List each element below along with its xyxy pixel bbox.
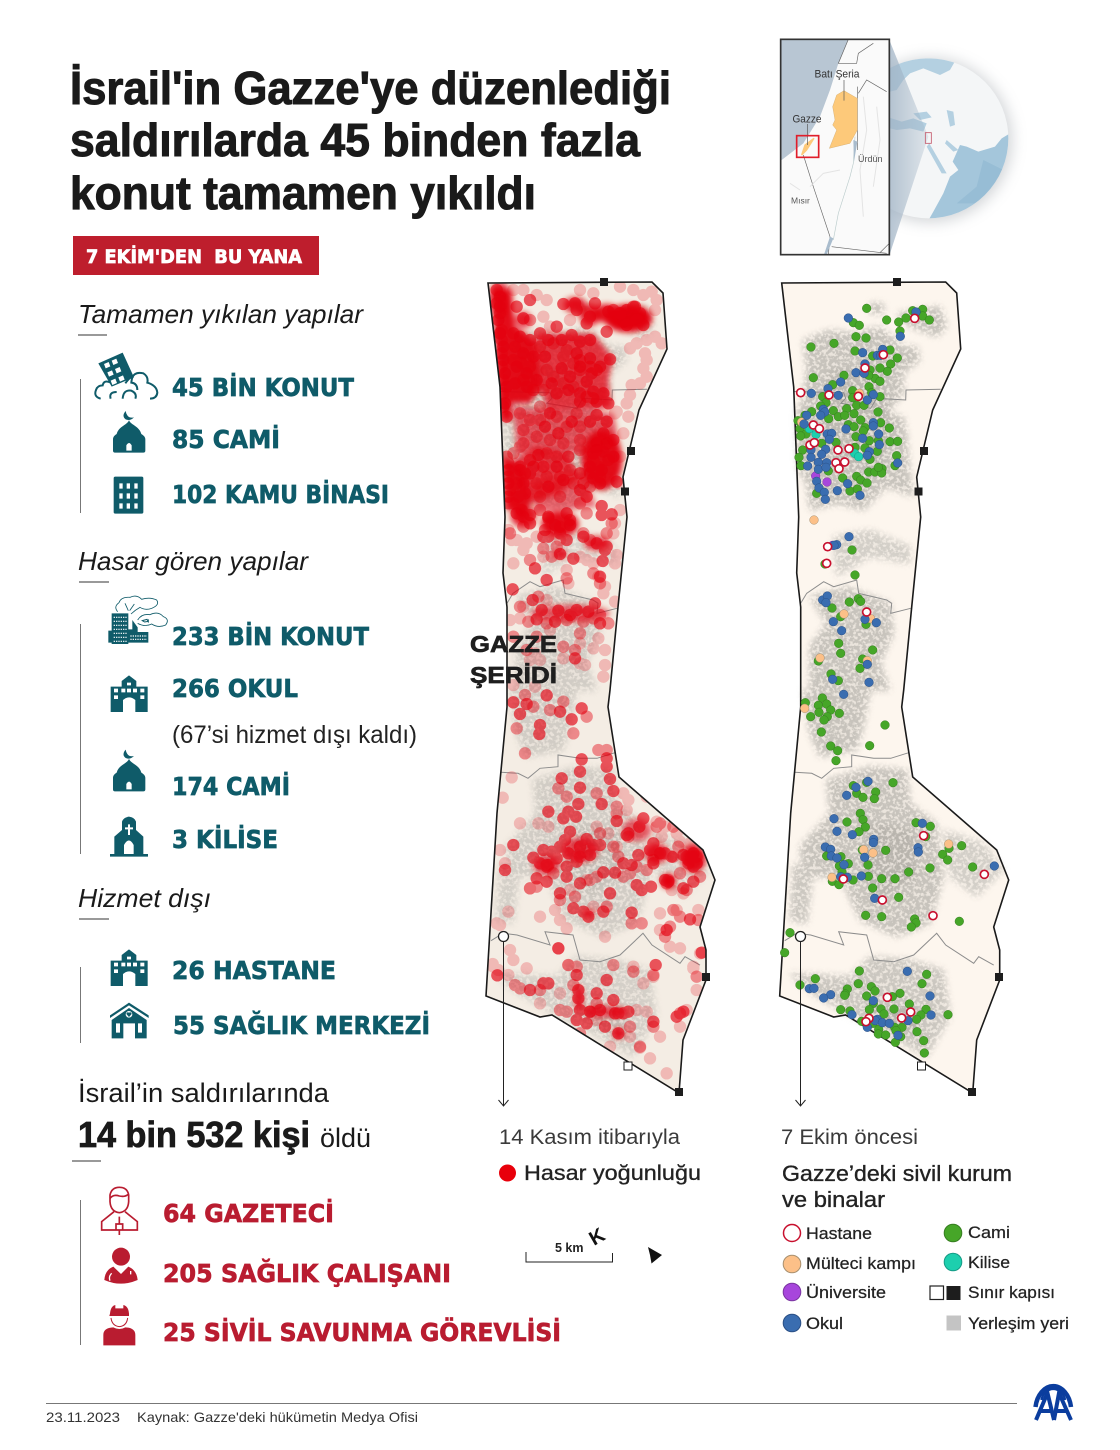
legend item: church: Kilise [968, 1253, 1010, 1272]
footer: date and source: Kaynak: Gazze'deki hükümetin Medya Ofisi [137, 1409, 418, 1425]
map label: Jordan: Ürdün [858, 154, 883, 164]
title: konut tamamen yıkıldı [70, 167, 536, 219]
strip base [486, 282, 715, 1093]
label: Gaza Strip: ŞERİDİ [470, 662, 557, 688]
label: 266 schools: 266 OKUL [172, 674, 298, 703]
strip base [780, 282, 1009, 1093]
scale bar [526, 1241, 612, 1262]
text: casualties intro: İsrail’in saldırılarında [78, 1077, 330, 1108]
legend item: refugee camp: Mülteci kampı [806, 1254, 916, 1273]
north marker: K [586, 1224, 609, 1250]
label: 45 thousand homes: 45 BİN KONUT [172, 372, 354, 402]
panel: damaged structures [78, 546, 417, 857]
legend item: university: Üniversite [806, 1283, 886, 1302]
badge: since 7 October [73, 236, 319, 275]
marker: leader arrow [796, 932, 806, 1106]
icon: civil defence worker [103, 1305, 135, 1345]
label: Gaza Strip [470, 631, 557, 688]
icon: school [111, 675, 148, 712]
locator: regional map [781, 39, 889, 255]
legend item: mosque: Cami [968, 1223, 1010, 1242]
map: civil institutions [780, 278, 1009, 1106]
legend title: ve binalar [782, 1187, 885, 1212]
panel: out of service [78, 883, 430, 1043]
icon: health worker [104, 1248, 138, 1284]
heading: destroyed structures: Tamamen yıkılan yapılar [78, 299, 364, 329]
label: 25 civil defence: 25 SİVİL SAVUNMA GÖREVLİSİ [163, 1317, 561, 1347]
label: 55 health centres: 55 SAĞLIK MERKEZİ [173, 1010, 430, 1040]
legend item: school: Okul [806, 1314, 843, 1333]
label: 85 mosques: 85 CAMİ [172, 424, 280, 454]
map label: Egypt: Mısır [791, 196, 810, 206]
badge: since 7 October: 7 EKİM'DEN BU YANA [86, 244, 302, 268]
institution dots north [794, 304, 934, 687]
note: out of service schools: (67’si hizmet dışı kaldı) [172, 721, 417, 749]
region: Gaza [802, 138, 814, 155]
icon: hospital [111, 949, 148, 986]
icon: church [110, 817, 148, 857]
icon: collapsing building [95, 353, 157, 399]
label: 26 hospitals: 26 HASTANE [172, 956, 336, 985]
logo: AA [1036, 1386, 1071, 1420]
legend: damage density: Hasar yoğunluğu [524, 1162, 701, 1185]
damage dots north [497, 287, 662, 687]
damage blobs south [533, 819, 706, 1039]
heading: damaged structures: Hasar gören yapılar [78, 546, 309, 576]
legend item: border crossing: Sınır kapısı [968, 1283, 1055, 1302]
legend item: settlement: Yerleşim yeri [968, 1314, 1069, 1333]
icon: journalist [102, 1187, 137, 1235]
title [70, 62, 671, 219]
damage dots south [493, 695, 702, 1073]
title: İsrail'in Gazze'ye düzenlediği [70, 62, 671, 114]
caption: before 7 October: 7 Ekim öncesi [781, 1126, 918, 1149]
legend: institutions [783, 1223, 1069, 1333]
border crossings [600, 278, 710, 1096]
label: Gaza Strip: GAZZE [470, 631, 557, 657]
title: saldırılarda 45 binden fazla [70, 114, 640, 166]
label: 64 journalists: 64 GAZETECİ [163, 1198, 334, 1228]
region: West Bank [829, 91, 857, 148]
locator: globe [890, 42, 1018, 253]
footer: date and source: 23.11.2023 [46, 1409, 120, 1425]
map: damage density [486, 278, 715, 1106]
marker: leader arrow [498, 932, 508, 1106]
institution dots south [780, 690, 999, 1057]
label: 233 thousand homes: 233 BİN KONUT [172, 621, 369, 651]
icon: damaged buildings [108, 596, 167, 644]
damage blobs north [489, 282, 652, 622]
strip outline [486, 282, 715, 1093]
legend title [782, 1161, 1012, 1212]
map label: Gaza: Gazze [792, 114, 822, 126]
legend item: hospital: Hastane [806, 1224, 872, 1243]
border crossings [893, 278, 1003, 1096]
legend title: Gazze’deki sivil kurum [782, 1161, 1012, 1186]
legend item: school [783, 1314, 843, 1333]
map label: West Bank: Batı Şeria [814, 68, 860, 80]
label: 205 health workers: 205 SAĞLIK ÇALIŞANI [163, 1258, 451, 1288]
label: 102 public buildings: 102 KAMU BİNASI [172, 479, 389, 509]
icon: public building [114, 477, 143, 514]
caption: as of 14 November: 14 Kasım itibarıyla [499, 1126, 680, 1149]
legend item: border crossing [930, 1283, 1055, 1302]
legend item: church [944, 1253, 1010, 1272]
icon: mosque [113, 750, 145, 791]
label: 174 mosques: 174 CAMİ [172, 771, 290, 801]
icon: mosque [113, 411, 145, 453]
panel: destroyed structures [78, 299, 389, 514]
north marker [586, 1224, 662, 1264]
heading: out of service: Hizmet dışı [78, 883, 211, 913]
stat: 14 thousand 532 killed: öldü [320, 1123, 371, 1153]
stat: 14 thousand 532 killed: 14 bin 532 kişi [78, 1114, 310, 1155]
panel: casualties [72, 1077, 561, 1347]
icon: health centre [110, 1003, 149, 1038]
label: 3 churches: 3 KİLİSE [172, 824, 278, 854]
strip outline [780, 282, 1009, 1093]
scale bar: 5 km [555, 1241, 584, 1255]
legend item: mosque [944, 1223, 1010, 1242]
